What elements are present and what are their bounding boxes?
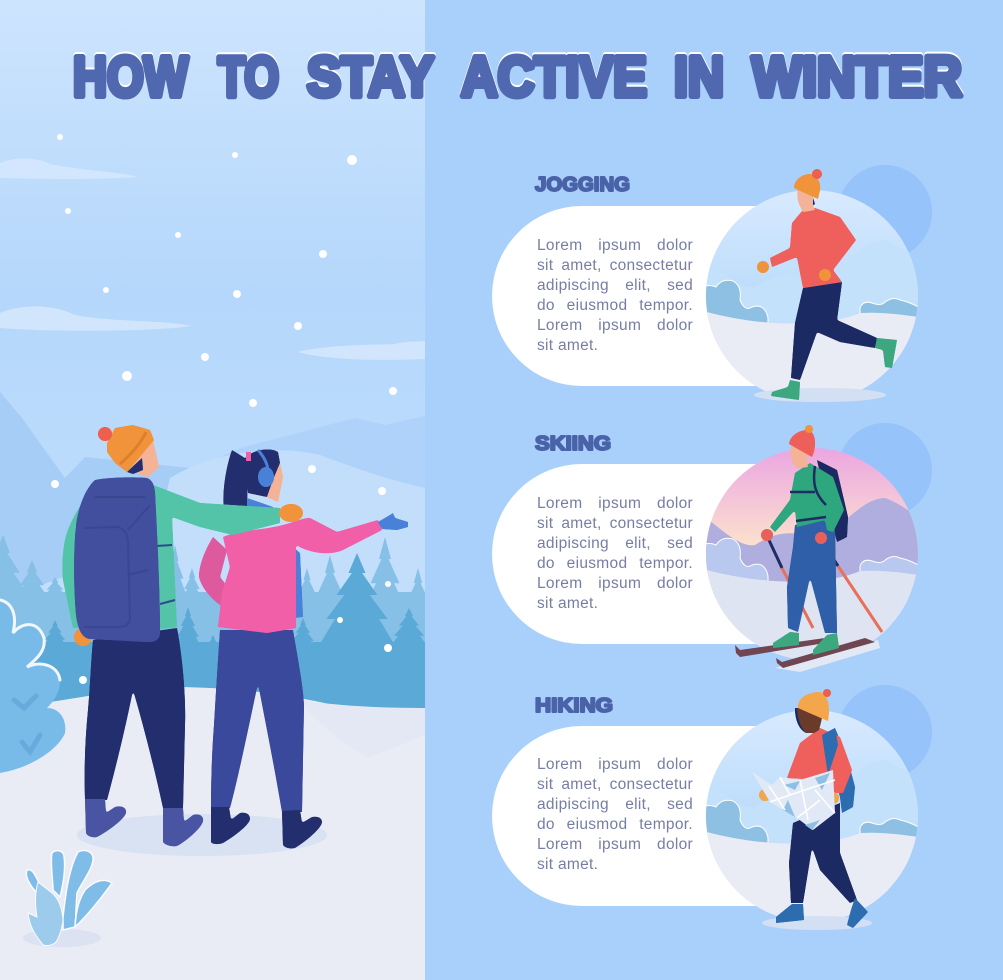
text block: hiking: Lorem ipsum dolor: [537, 756, 693, 773]
icon: snowy plant: [23, 850, 112, 947]
text block: skiing: sit amet, consectetur: [537, 515, 693, 532]
decorative circle: [838, 685, 932, 779]
text block: jogging: do eiusmod tempor.: [537, 297, 693, 314]
scene circle: [706, 711, 918, 917]
panel: skiing: [492, 423, 932, 672]
text block: jogging: Lorem ipsum dolor: [537, 317, 693, 334]
snowflakes: [51, 134, 397, 684]
sky clouds: [0, 159, 425, 360]
figure: hiker: [752, 689, 872, 930]
text block: jogging: sit amet, consectetur: [537, 257, 693, 274]
snowy ground: [0, 687, 425, 980]
figure: man: [62, 425, 303, 846]
mountains: [0, 392, 425, 600]
title: HOW: [73, 45, 188, 109]
text block: hiking: adipiscing elit, sed: [537, 796, 693, 813]
figure: jogger: [754, 169, 897, 402]
panel: jogging: [492, 165, 932, 410]
text block: hiking: Lorem ipsum dolor: [537, 836, 693, 853]
text block: jogging: Lorem ipsum dolor: [537, 237, 693, 254]
text block: hiking: [537, 756, 693, 873]
figure shadow: [77, 814, 327, 856]
title: [73, 45, 962, 109]
decorative circle: [838, 165, 932, 259]
heading: skiing: SKIING: [535, 433, 611, 455]
title: STAY: [307, 45, 434, 109]
figure: skier: [735, 425, 882, 672]
icon: snowy bush: [0, 600, 65, 773]
title: IN: [674, 45, 724, 109]
text card: [492, 726, 757, 906]
panel: right background: [425, 0, 1003, 980]
text block: skiing: Lorem ipsum dolor: [537, 575, 693, 592]
text block: hiking: sit amet.: [537, 856, 598, 873]
text block: hiking: sit amet, consectetur: [537, 776, 693, 793]
text block: jogging: adipiscing elit, sed: [537, 277, 693, 294]
panel: winter landscape: [0, 0, 439, 980]
text card: [492, 464, 757, 644]
text block: skiing: adipiscing elit, sed: [537, 535, 693, 552]
text block: jogging: [537, 237, 693, 354]
panel: hiking: [492, 685, 932, 930]
forest: [0, 535, 439, 720]
text block: skiing: do eiusmod tempor.: [537, 555, 693, 572]
text block: skiing: Lorem ipsum dolor: [537, 495, 693, 512]
text block: skiing: sit amet.: [537, 595, 598, 612]
title: TO: [218, 45, 279, 109]
scene circle: [700, 190, 925, 410]
text block: skiing: [537, 495, 693, 612]
title: ACTIVE: [461, 45, 647, 109]
text block: jogging: sit amet.: [537, 337, 598, 354]
text block: hiking: do eiusmod tempor.: [537, 816, 693, 833]
title: WINTER: [752, 45, 962, 109]
figure: woman: [199, 450, 408, 848]
heading: hiking: HIKING: [535, 695, 613, 717]
decorative circle: [838, 423, 932, 517]
heading: jogging: JOGGING: [535, 174, 630, 196]
text card: [492, 206, 757, 386]
scene circle: [700, 448, 925, 668]
